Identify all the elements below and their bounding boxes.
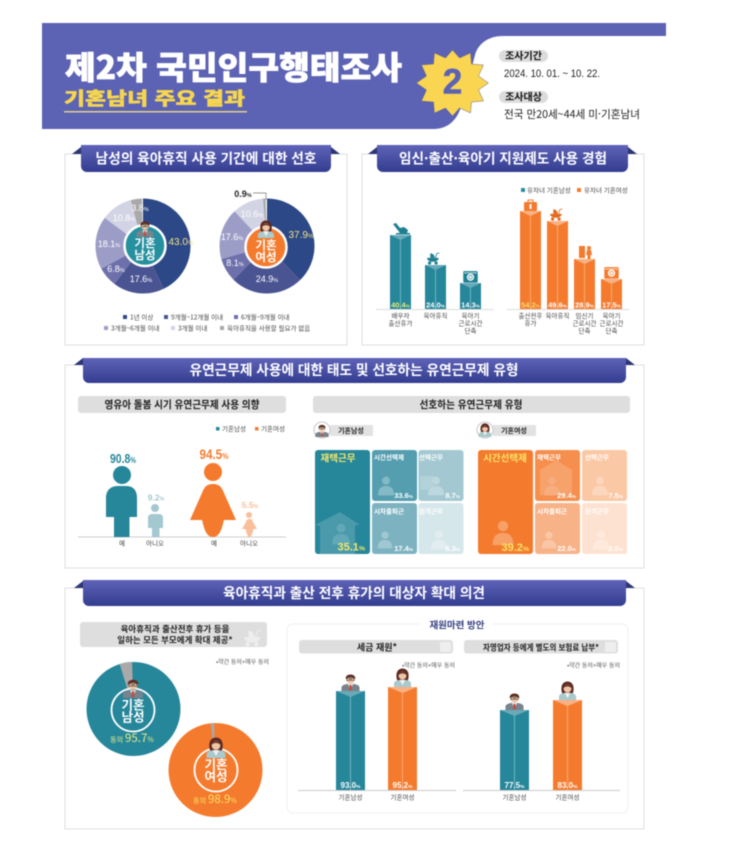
label: men: 기혼남성 [338,426,364,436]
treemap: women: 22.0% [557,544,576,553]
man yes [106,451,137,537]
legend: 기혼남성 [222,423,246,433]
subheading: extension: 육아휴직과 출산전후 휴가 등을 [121,623,230,635]
subtitle: 기혼남녀 주요 결과 [64,85,246,111]
woman yes: 94.5% [200,446,229,462]
treemap: men: 17.4% [394,544,413,553]
panel: support system usage [362,145,644,345]
icon: star badge 2: 2 [443,62,462,102]
donut labels: women: 0.9% [234,189,252,199]
axis labels: 단축 [465,325,476,335]
pictogram chart: intention [78,446,286,548]
label: women [477,422,536,438]
heading: 육아휴직과 출산 전후 휴가의 대상자 확대 의견 [223,583,485,603]
note: •약간 동의+매우 동의 [567,660,620,670]
icon: stroller [427,253,439,265]
bar chart: fathers [376,223,494,335]
axis labels: 근로시간 [459,318,482,328]
heading: 임신·출산·육아기 지원제도 사용 경험 [399,148,607,168]
axis labels [389,310,482,335]
legend: 기혼여성 [261,423,285,433]
treemap: men: 33.6% [394,491,413,500]
bar chart: mothers: 54.2% [521,300,540,310]
donut chart: women [243,222,291,270]
panel: flexible work [65,358,644,568]
icon: stroller [550,209,562,221]
legend [104,312,310,332]
donut centre: men [124,221,166,266]
subheading: tax [299,640,453,654]
treemap: men [315,450,464,554]
subheading: preferred types: 선호하는 유연근무제 유형 [420,397,522,412]
donut labels: men: 6.8% [107,264,125,274]
survey target: 전국 만20세~44세 미·기혼남녀 [504,106,640,122]
label: women: 기혼여성 [501,426,527,436]
donut labels: women: 37.9% [289,230,314,241]
treemap: women: 재택근무 [537,452,561,462]
circle chart: women: 여성 [204,766,228,785]
treemap: men: 선택근무 [419,452,443,462]
bar chart: insurance: 83.0% [558,781,578,790]
legend [521,184,628,194]
treemap: men: 6.3% [445,544,460,553]
legend: 6개월~9개월 이내 [241,312,290,322]
donut labels: men: 10.8% [113,213,135,223]
donut labels: women: 17.6% [221,232,243,242]
legend: 육아휴직을 사용할 필요가 없음 [227,322,310,332]
donut labels: women: 24.9% [256,274,278,284]
subheading: intention: 영유아 돌봄 시기 유연근무제 사용 의향 [104,397,260,412]
bar chart: tax [298,668,456,802]
axis labels: 출산전후 [519,310,542,320]
woman yes [190,446,236,537]
bar chart: mothers: 49.6% [548,300,567,310]
axis labels [519,310,623,335]
treemap: men: 8.7% [445,491,460,500]
woman no [242,500,259,537]
man no [148,492,165,537]
sub-panel: funding plans [287,618,628,813]
legend: 유자녀 기혼여성 [584,184,628,194]
heading: 유연근무제 사용에 대한 태도 및 선호하는 유연근무제 유형 [190,360,518,380]
legend: 3개월 이내 [178,322,207,332]
panel: paternity leave preference [65,145,347,345]
axis labels: 아니오 [146,538,164,548]
treemap: women: 시간선택제 [483,450,527,464]
circle chart: men: 기혼 [121,694,145,714]
treemap: women: 원격근무 [585,506,609,516]
survey period [499,48,600,80]
subheading: preferred types [313,396,630,413]
circle chart: men: 남성 [121,706,145,726]
faint icons [493,460,609,549]
bar chart: fathers: 40.4% [391,300,410,310]
bar chart: tax: 93.0% [341,781,361,790]
axis labels: 예 [211,538,217,548]
subheading: insurance: 자영업자 등에게 별도의 보험료 납부* [483,642,599,654]
bar chart: insurance: 기혼남성 [503,792,526,802]
treemap: men: 35.1% [338,542,365,554]
axis labels: 육아휴직 [424,310,447,320]
axis labels: 근로시간 [573,318,596,328]
donut centre: men: 기혼 [134,235,156,251]
woman no: 5.5% [242,500,259,510]
icon: clock calendar [463,271,478,283]
donut labels: men [98,203,194,284]
axis labels [119,538,258,548]
bar chart: insurance: 77.5% [505,781,525,790]
donut centre: women: 기혼 [255,237,277,253]
treemap: women: 시차출퇴근 [537,506,567,516]
sub-panel title: 재원마련 방안 [429,618,485,632]
axis labels: 육아기 [603,310,620,320]
note: •약간 동의+매우 동의 [402,660,455,670]
axis labels: 근로시간 [600,318,623,328]
icon: pregnant woman at door [579,246,592,259]
donut labels: women: 8.1% [226,258,244,268]
title: 제2차 국민인구행태조사 [65,43,402,89]
donut labels: women: 10.6% [241,209,263,219]
treemap: men: 원격근무 [419,506,443,516]
icon: recliner [393,223,410,234]
circle chart: men [86,662,180,756]
axis labels: 임신기 [576,310,593,320]
bar chart: fathers: 24.0% [426,300,445,310]
treemap: men: 시간선택제 [374,452,404,462]
circle chart: women [168,723,262,817]
treemap: women: 2.0% [608,544,623,553]
label: men [314,422,373,438]
circle chart: women: 기혼 [204,754,228,773]
axis labels: 단축 [579,325,590,335]
faint icons [315,476,447,554]
bar chart: insurance: 기혼여성 [556,792,579,802]
legend [216,423,285,433]
treemap: women: 선택근무 [585,452,609,462]
legend: 유자녀 기혼남성 [527,184,571,194]
legend: 1년 이상 [130,312,153,322]
bar chart: fathers: 14.3% [461,300,480,310]
axis labels: 육아휴직 [546,310,569,320]
axis labels: 예 [119,538,125,548]
axis labels: 휴가 [525,318,536,328]
survey target [499,88,640,122]
panel: expansion opinion [65,580,644,829]
subheading: extension: 일하는 모든 부모에게 확대 제공* [117,634,233,646]
treemap: women [478,450,627,554]
donut labels: men: 17.6% [130,274,152,284]
note: •약간 동의+매우 동의 [216,657,269,666]
legend: 3개월~6개월 이내 [111,322,160,332]
donut centre: men: 남성 [134,247,156,263]
bar chart: mothers: 28.9% [575,300,594,310]
heading: 남성의 육아휴직 사용 기간에 대한 선호 [96,148,317,168]
subheading: extension [80,622,267,647]
axis labels: 아니오 [240,538,258,548]
icon: bag [524,200,537,211]
icon: stroller [244,630,261,647]
donut centre: women: 여성 [255,249,277,265]
treemap: men: 시차출퇴근 [374,506,404,516]
man yes: 90.8% [110,451,136,466]
survey target: 조사대상 [505,88,542,104]
bar chart: tax: 95.2% [393,781,413,790]
icon: clock calendar [604,267,619,279]
axis labels: 출산휴가 [389,318,412,328]
treemap: men: 재택근무 [321,450,356,464]
donut chart: men [119,222,167,270]
axis labels: 단축 [606,325,617,335]
bar chart: tax: 기혼여성 [391,792,414,802]
treemap: women: 7.5% [608,491,623,500]
donut centre: women [246,220,286,268]
donut labels: men: 18.1% [98,239,120,249]
bar chart: mothers [507,200,629,335]
circle chart: men: 동의 95.7% [110,730,154,746]
treemap: women: 39.2% [502,542,529,554]
man no: 9.2% [148,492,165,502]
donut labels: women [221,189,314,284]
header banner [42,23,666,129]
bar chart: tax: 기혼남성 [339,792,362,802]
treemap: women: 29.4% [557,491,576,500]
donut labels: men: 3.8% [131,203,149,213]
bar chart: insurance [463,681,620,802]
legend: 9개월~12개월 이내 [171,312,223,322]
donut labels: men: 43.0% [169,237,194,248]
circle chart: women: 동의 98.9% [193,791,237,807]
bar chart: mothers: 17.5% [602,300,621,310]
icon: star badge 2 [416,50,488,116]
survey period: 2024. 10. 01. ~ 10. 22. [504,68,600,80]
subheading: tax: 세금 재원* [357,640,398,654]
axis labels: 육아기 [462,310,479,320]
survey period: 조사기간 [505,48,542,62]
axis labels: 배우자 [392,310,409,320]
